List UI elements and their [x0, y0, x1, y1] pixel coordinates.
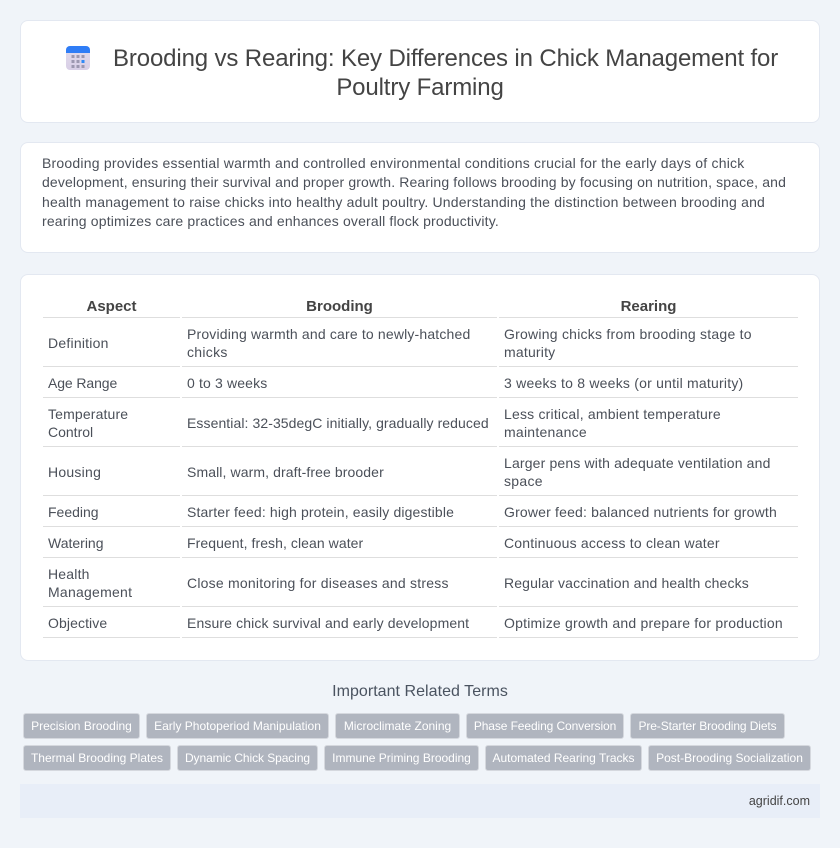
related terms heading: Important Related Terms [332, 683, 508, 700]
row: definition: Growing chicks from brooding stage to [504, 326, 752, 342]
column headers: Aspect [86, 298, 137, 315]
row: age range: 3 weeks to 8 weeks (or until maturity) [504, 375, 743, 391]
row: health management: Management [48, 584, 132, 600]
row: definition: Definition [48, 335, 109, 351]
related terms tags: Early Photoperiod Manipulation [154, 719, 321, 733]
row: health management: Close monitoring for diseases and stress [187, 575, 449, 591]
row: temperature control: Less critical, ambient temperature [504, 406, 721, 422]
row: housing: Larger pens with adequate ventilation and [504, 455, 771, 471]
comparison table panel [20, 274, 820, 661]
intro panel [20, 142, 820, 253]
header panel [20, 20, 820, 123]
row: objective: Ensure chick survival and early development [187, 615, 469, 631]
row: watering: Continuous access to clean water [504, 535, 720, 551]
row: health management: Health [48, 566, 90, 582]
row: temperature control: Essential: 32-35degC initially, gradually reduced [187, 415, 489, 431]
row: housing: space [504, 473, 543, 489]
row: watering [48, 535, 720, 551]
related terms tags: Microclimate Zoning [344, 719, 451, 733]
row: temperature control: Temperature [48, 406, 128, 422]
related terms tags: Post-Brooding Socialization [656, 751, 803, 765]
intro text [42, 155, 786, 229]
column headers: Rearing [621, 298, 676, 315]
title: Poultry Farming [336, 74, 504, 101]
footer source: agridif.com [749, 794, 810, 808]
row: age range: 0 to 3 weeks [187, 375, 267, 391]
related terms tags: Precision Brooding [31, 719, 132, 733]
row: feeding: Feeding [48, 504, 99, 520]
related terms tags: Pre-Starter Brooding Diets [638, 719, 777, 733]
footer bar [20, 784, 820, 818]
column headers: Brooding [306, 298, 373, 315]
related terms tags: Immune Priming Brooding [332, 751, 471, 765]
row: housing: Small, warm, draft-free brooder [187, 464, 384, 480]
row: definition [48, 326, 752, 360]
intro text: Brooding provides essential warmth and controlled environmental conditions crucial for the early days of chick [42, 155, 744, 171]
row: housing [48, 455, 771, 489]
intro text: development, ensuring their survival and proper growth. Rearing follows brooding by focusing on nutrition, space, and [42, 174, 786, 190]
related terms tags [23, 713, 811, 771]
intro text: rearing optimizes care practices and enhances overall flock productivity. [42, 213, 499, 229]
column headers [86, 298, 676, 315]
comparison table [43, 298, 798, 638]
row: definition: maturity [504, 344, 555, 360]
row: watering: Frequent, fresh, clean water [187, 535, 363, 551]
row: temperature control [48, 406, 721, 440]
related terms tags: Automated Rearing Tracks [492, 751, 635, 765]
row: watering: Watering [48, 535, 104, 551]
icon: calendar [66, 46, 90, 70]
row: temperature control: maintenance [504, 424, 587, 440]
row: temperature control: Control [48, 424, 93, 440]
row: health management [48, 566, 749, 600]
title: Brooding vs Rearing: Key Differences in Chick Management for [113, 45, 778, 72]
row: age range [48, 375, 743, 391]
row: objective [48, 615, 783, 631]
row: feeding [48, 504, 777, 520]
row: definition: Providing warmth and care to newly-hatched [187, 326, 470, 342]
related terms tags: Thermal Brooding Plates [31, 751, 163, 765]
title [113, 45, 778, 101]
row: definition: chicks [187, 344, 228, 360]
row: housing: Housing [48, 464, 101, 480]
intro text: health management to raise chicks into healthy adult poultry. Understanding the distinction between brooding and [42, 194, 765, 210]
row: feeding: Starter feed: high protein, easily digestible [187, 504, 454, 520]
related terms tags: Phase Feeding Conversion [474, 719, 616, 733]
row: feeding: Grower feed: balanced nutrients for growth [504, 504, 777, 520]
row: objective: Objective [48, 615, 107, 631]
related terms tags: Dynamic Chick Spacing [185, 751, 310, 765]
row: health management: Regular vaccination and health checks [504, 575, 749, 591]
row: objective: Optimize growth and prepare for production [504, 615, 783, 631]
row: age range: Age Range [48, 375, 117, 391]
